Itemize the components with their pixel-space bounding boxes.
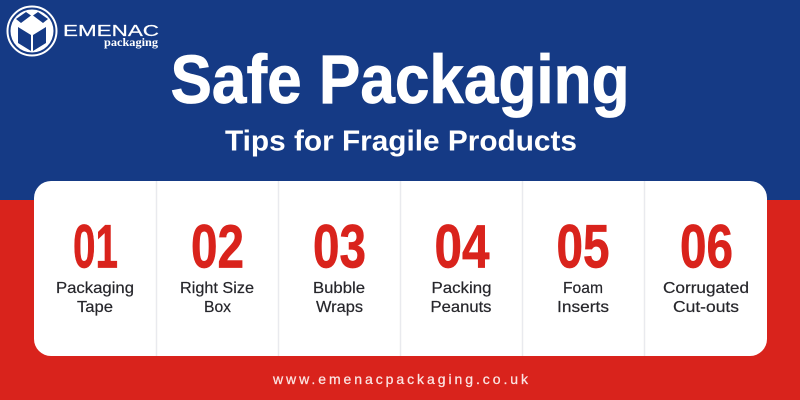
tip 05	[556, 212, 610, 316]
label line 2: Inserts	[557, 299, 609, 316]
logo wordmark: EMENAC	[63, 23, 159, 40]
number 03: 03	[313, 212, 366, 280]
title: Safe Packaging	[170, 41, 630, 118]
label line 1: Packing	[432, 280, 492, 297]
tip 04	[430, 212, 492, 316]
label line 1: Foam	[563, 280, 603, 297]
label line 2: Tape	[77, 299, 113, 316]
label line 2: Wraps	[316, 299, 363, 316]
label line 2: Box	[204, 299, 231, 316]
number 05: 05	[556, 212, 610, 280]
label line 1: Bubble	[313, 280, 365, 297]
panel: tips card	[34, 181, 767, 356]
label line 2: Cut-outs	[673, 299, 739, 316]
subtitle: Tips for Fragile Products	[225, 126, 577, 158]
label line 1: Packaging	[56, 280, 134, 297]
logo	[8, 6, 159, 56]
label line 2: Peanuts	[430, 299, 492, 316]
blue header background	[0, 0, 800, 200]
number 06: 06	[680, 212, 733, 280]
tip 06	[663, 212, 749, 316]
red footer background	[0, 200, 800, 400]
number 01: 01	[73, 212, 118, 280]
tip 01	[56, 212, 134, 316]
website url: www.emenacpackaging.co.uk	[272, 371, 529, 387]
tip 03	[313, 212, 366, 316]
tip 02	[180, 212, 254, 316]
label line 1: Right Size	[180, 280, 254, 297]
number 04: 04	[434, 212, 490, 280]
number 02: 02	[191, 212, 244, 280]
logo subtext: packaging	[104, 35, 158, 49]
icon: box in circle	[8, 6, 56, 56]
label line 1: Corrugated	[663, 280, 749, 297]
